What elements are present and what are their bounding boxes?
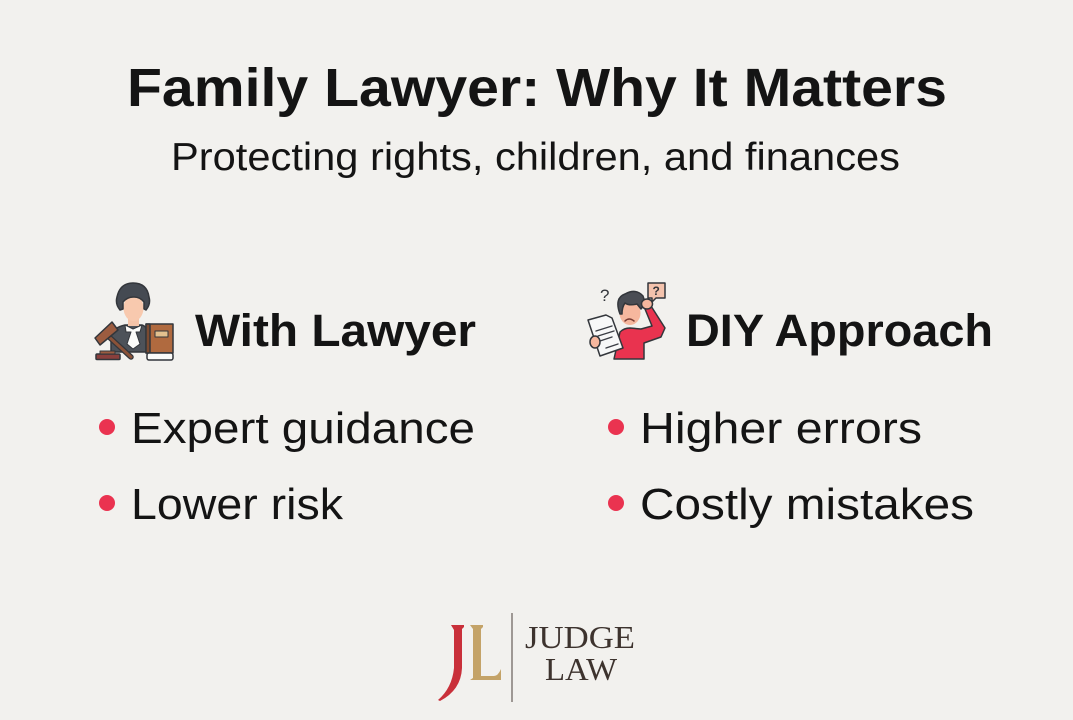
logo: Judge Law bbox=[438, 613, 635, 702]
subtitle: Protecting rights, children, and finances bbox=[171, 136, 900, 179]
icon: confused person with document bbox=[588, 283, 665, 359]
bullet: higher errors: Higher errors bbox=[640, 404, 922, 453]
title: Family Lawyer: Why It Matters bbox=[127, 58, 947, 118]
divider bbox=[512, 613, 513, 702]
icon: confused person with document: ? bbox=[652, 284, 660, 298]
panel: DIY approach bbox=[588, 283, 993, 529]
heading: with lawyer: With Lawyer bbox=[195, 305, 476, 356]
bullet: costly mistakes: Costly mistakes bbox=[640, 480, 974, 529]
panel: with lawyer bbox=[95, 283, 476, 529]
bullet: expert guidance: Expert guidance bbox=[131, 404, 475, 453]
heading: DIY approach: DIY Approach bbox=[686, 305, 993, 356]
logo mark: JL monogram bbox=[438, 625, 501, 701]
icon: confused person with document: ? bbox=[600, 286, 609, 305]
logo text: Judge: JUDGE bbox=[525, 619, 635, 655]
logo text: Law: LAW bbox=[545, 651, 618, 687]
icon: lawyer with gavel and book bbox=[95, 283, 173, 360]
bullet: lower risk: Lower risk bbox=[131, 480, 344, 529]
